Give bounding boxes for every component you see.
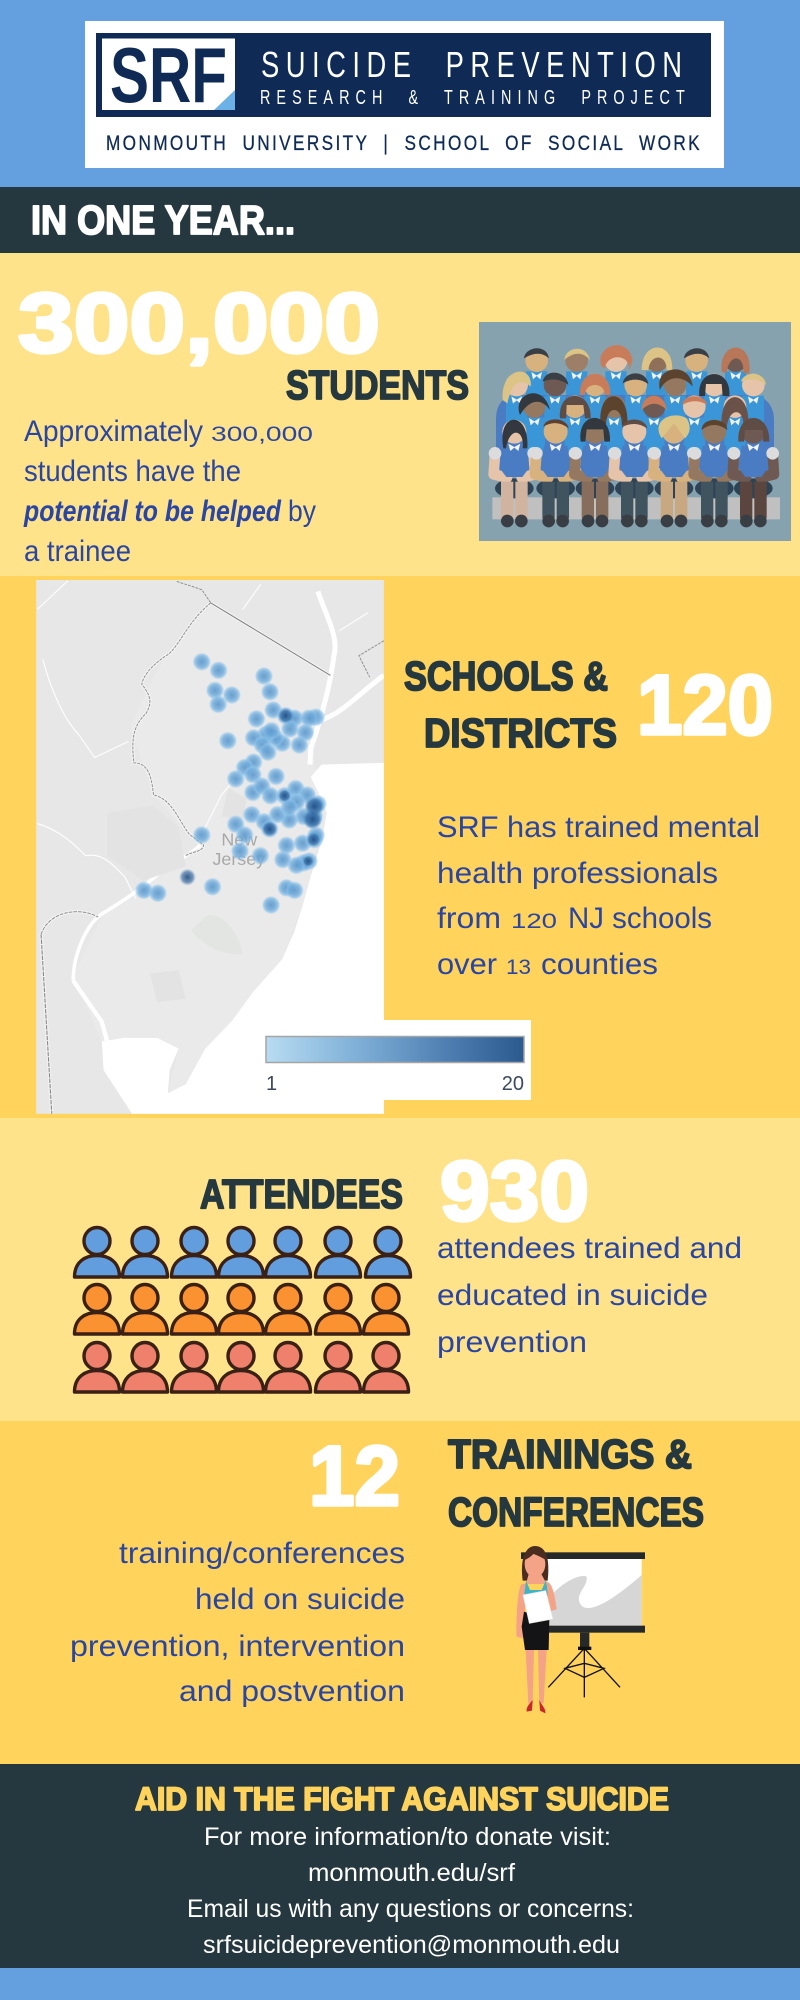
text block: schools description: 13 [506, 956, 531, 979]
text block: schools description: counties [541, 948, 658, 981]
big number: 12: 12 [309, 1429, 400, 1523]
text block: attendees description: attendees trained and [437, 1232, 742, 1265]
text block: contact details [187, 1823, 634, 1959]
text block: students description: 300,000 [211, 423, 313, 446]
panel background: title bar [0, 187, 800, 253]
heading: trainings and conferences: CONFERENCES [448, 1489, 704, 1535]
text block: attendees description: educated in suicide [437, 1279, 708, 1312]
heading: aid in the fight: AID IN THE FIGHT AGAINST SUICIDE [135, 1781, 669, 1817]
panel: schools and districts [36, 580, 773, 1114]
map legend [259, 1020, 531, 1100]
text block: schools description: SRF has trained mental [437, 811, 760, 844]
background: bottom blue band [0, 1968, 800, 2000]
background: top blue band [0, 0, 800, 187]
text block: schools description: NJ schools [568, 902, 712, 935]
text block: contact details: monmouth.edu/srf [308, 1859, 515, 1887]
panel: footer call to action [135, 1781, 669, 1959]
panel: attendees [74, 1144, 742, 1392]
illustration: group of students [479, 322, 791, 541]
heading: schools and districts: SCHOOLS & [404, 653, 608, 699]
illustration: presenter with projection screen [516, 1546, 645, 1713]
text block: students description: by [288, 495, 316, 528]
text block: trainings description: prevention, intervention [70, 1630, 405, 1663]
panel background: trainings [0, 1421, 800, 1764]
map of New Jersey with school locations: Jersey [212, 849, 265, 869]
logo: SUICIDE PREVENTION [261, 44, 682, 85]
heading: students: STUDENTS [286, 362, 469, 408]
panel: students [18, 276, 791, 568]
panel background: attendees [0, 1118, 800, 1421]
text block: attendees description [437, 1232, 742, 1359]
map of New Jersey with school locations: New [221, 830, 257, 850]
text block: schools description: from [437, 902, 501, 935]
text block: students description: students have the [24, 455, 241, 488]
text block: students description: potential to be helped [23, 495, 282, 528]
text block: trainings description: training/conferences [119, 1537, 405, 1570]
heading: attendees: ATTENDEES [200, 1171, 403, 1217]
heading: trainings and conferences: TRAININGS & [448, 1431, 692, 1477]
text block: schools description: health professionals [437, 857, 718, 890]
big number: 930: 930 [440, 1144, 589, 1238]
text block: trainings description: and postvention [179, 1675, 405, 1708]
text block: contact details: For more information/to donate visit: [204, 1823, 611, 1851]
text block: trainings description [70, 1537, 405, 1708]
big number: 120: 120 [637, 658, 773, 752]
text block: schools description: over [437, 948, 497, 981]
panel background: footer [0, 1764, 800, 1968]
heading: trainings and conferences [448, 1431, 704, 1535]
heading: schools and districts [404, 653, 617, 756]
title: in one year: IN ONE YEAR... [31, 197, 295, 243]
text block: contact details: Email us with any questions or concerns: [187, 1895, 634, 1923]
panel background: schools [0, 576, 800, 1118]
map legend: 20 [502, 1073, 524, 1095]
text block: students description: a trainee [24, 535, 131, 568]
text block: trainings description: held on suicide [195, 1583, 405, 1616]
map of New Jersey with school locations [36, 580, 384, 1114]
logo: SRF [110, 31, 227, 119]
text block: contact details: srfsuicideprevention@monmouth.edu [203, 1931, 620, 1959]
text block: schools description: 120 [511, 910, 557, 933]
big number: 300,000: 300,000 [18, 276, 380, 370]
text block: students description: Approximately [24, 415, 203, 448]
logo [85, 21, 724, 168]
text block: attendees description: prevention [437, 1326, 587, 1359]
logo: MONMOUTH UNIVERSITY | SCHOOL OF SOCIAL WORK [106, 133, 700, 155]
icon grid: people [74, 1228, 410, 1392]
panel background: students [0, 253, 800, 576]
text block: schools description [437, 811, 760, 981]
logo: RESEARCH & TRAINING PROJECT [260, 86, 685, 109]
text block: students description [23, 415, 316, 568]
heading: schools and districts: DISTRICTS [424, 710, 617, 756]
map legend: 1 [266, 1073, 277, 1095]
panel: trainings and conferences [70, 1429, 704, 1713]
